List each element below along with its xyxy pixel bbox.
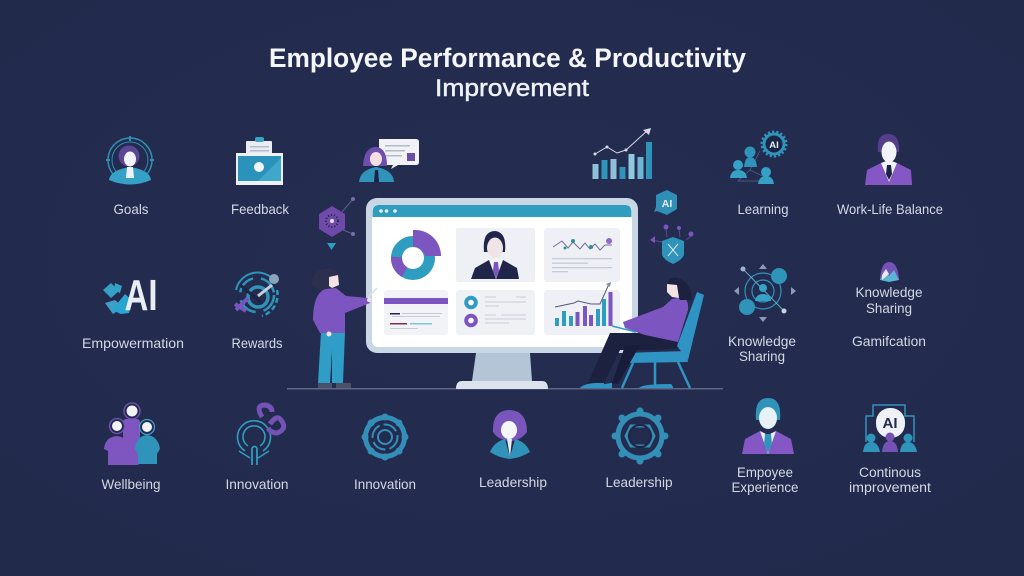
label: rewards: Rewards (232, 335, 282, 351)
panel: list (384, 290, 448, 335)
label: knowledge sharing (right): Knowledge (856, 285, 922, 300)
icon: AI empowerment: AI (124, 271, 158, 320)
label: knowledge sharing (middle): Knowledge (728, 334, 796, 349)
icon: continuous improvement AI: AI (882, 415, 898, 432)
panel: line chart and text (544, 228, 620, 282)
monitor bezel (366, 198, 638, 353)
panel: portrait (456, 228, 535, 282)
icon: shield network (650, 224, 694, 264)
label: innovation: Innovation (226, 476, 288, 492)
title: Employee Performance & Productivity (269, 43, 746, 73)
panel: bar chart (544, 282, 620, 335)
person: analyst seated (580, 278, 692, 388)
label: continuous improvement: improvement (849, 480, 931, 495)
label: employee experience: Empoyee (737, 465, 793, 480)
label: gamification: Gamifcation (852, 333, 926, 349)
icon: AI hexagon badge: AI (662, 198, 672, 210)
icon: innovation gear (362, 414, 408, 460)
monitor stand (472, 353, 532, 381)
blue chair (622, 292, 704, 388)
label: innovation (second): Innovation (354, 476, 416, 492)
label: leadership (second): Leadership (606, 474, 673, 490)
icon: innovation bulb (237, 405, 284, 465)
monitor illustration (366, 198, 638, 389)
ground line (287, 388, 723, 390)
icon: goals (106, 136, 154, 184)
label: employee experience: Experience (732, 480, 798, 495)
title (269, 43, 746, 102)
icon: feedback person with speech bubble (359, 139, 419, 182)
icon: rewards target (235, 273, 279, 316)
icon: feedback (236, 137, 283, 185)
label: leadership: Leadership (479, 474, 547, 490)
icon: leadership woman (490, 410, 530, 459)
donut chart (396, 230, 441, 274)
icon: employee experience person (742, 398, 794, 454)
icon: leadership gear (612, 408, 668, 464)
icon: learning: AI (769, 140, 779, 151)
icon: work-life balance person (865, 134, 912, 185)
label: wellbeing: Wellbeing (102, 476, 160, 492)
monitor screen (372, 205, 632, 347)
label: knowledge sharing (middle): Sharing (739, 349, 785, 364)
icon: learning (730, 132, 786, 184)
window bar (372, 205, 632, 217)
icon: growth chart (592, 128, 652, 179)
icon: small person (880, 262, 899, 282)
label: feedback: Feedback (231, 201, 290, 217)
label: knowledge sharing (right): Sharing (866, 301, 912, 316)
title: Improvement (435, 75, 589, 102)
label: empowerment: Empowermation (82, 335, 184, 351)
label: goals: Goals (114, 201, 148, 217)
label: work-life balance: Work-Life Balance (837, 201, 943, 217)
label: continuous improvement: Continous (859, 465, 921, 480)
icon: AI empowerment (103, 271, 158, 320)
icon: knowledge sharing network (734, 264, 796, 322)
icon: purple hexagon node (319, 197, 355, 250)
monitor base (456, 381, 548, 389)
label: learning: Learning (738, 201, 788, 217)
person: presenter standing (312, 269, 377, 388)
panel: mini donuts (456, 290, 535, 335)
icon: wellbeing group (104, 403, 160, 465)
icon: continuous improvement AI (863, 405, 917, 452)
icon: AI hexagon badge (654, 190, 677, 215)
